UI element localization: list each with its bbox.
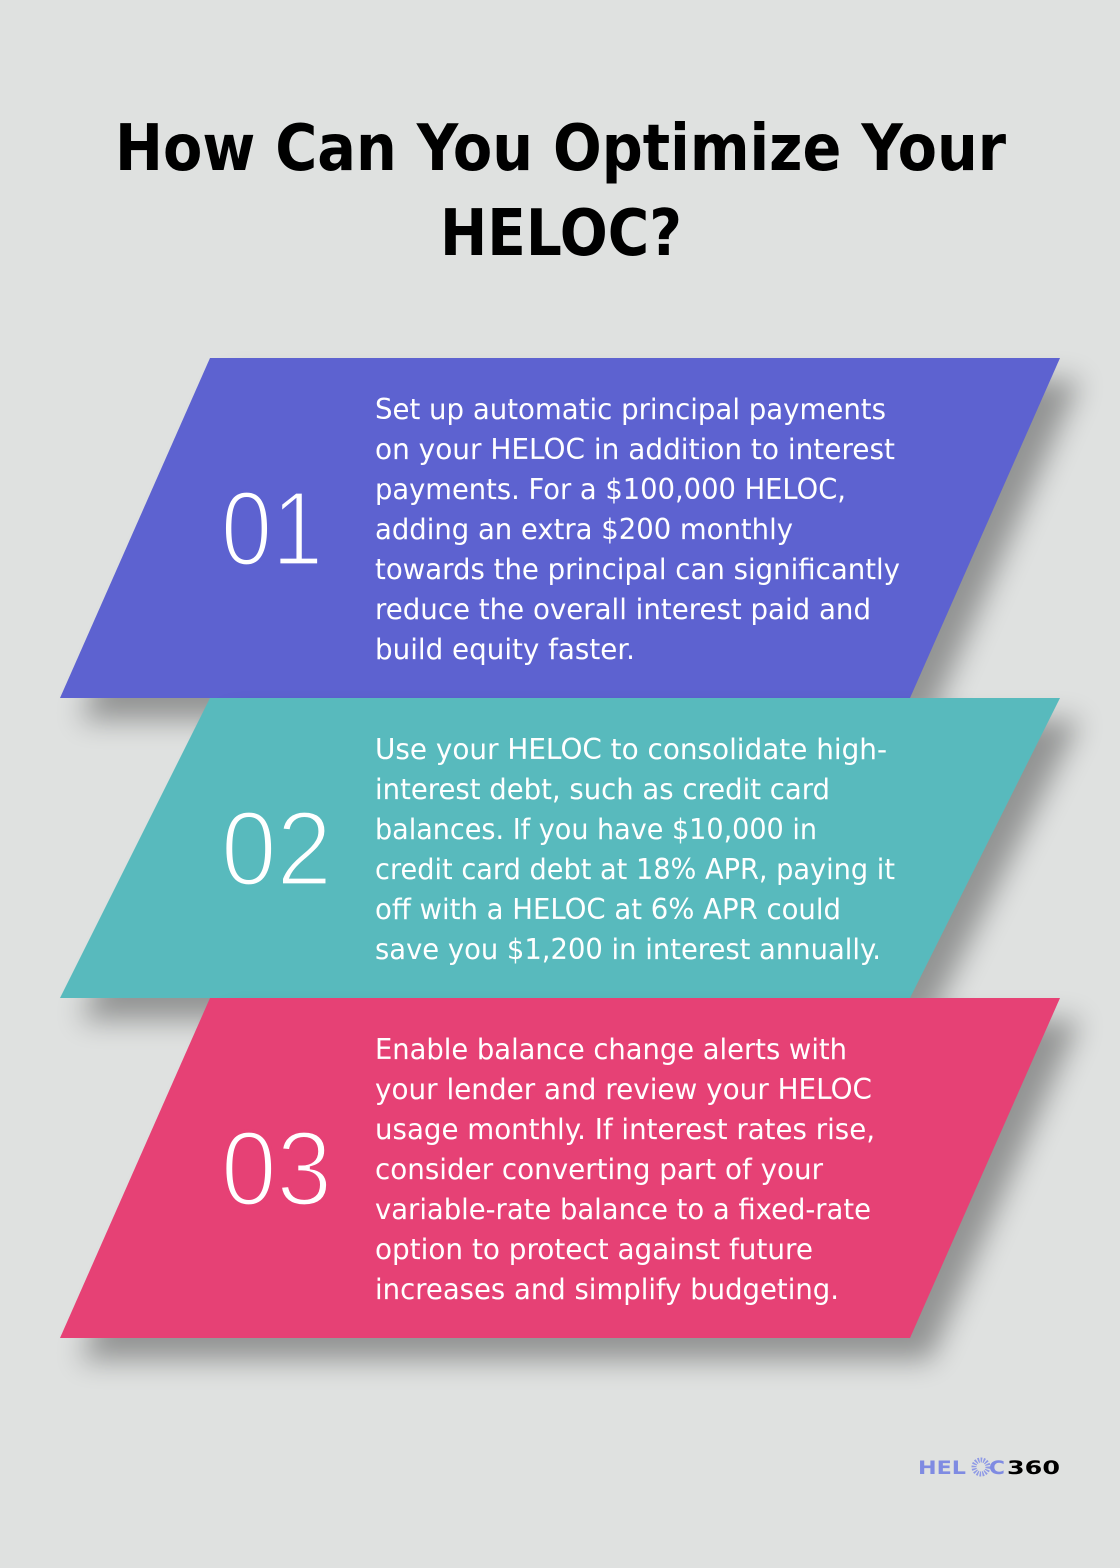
text: step 03 body: increases and simplify budgeting. (375, 1273, 839, 1306)
title (115, 112, 1006, 271)
panel: step 02 (60, 698, 1080, 1020)
text: step 02 body: save you $1,200 in interest annually. (375, 933, 881, 966)
text: step 03 body (375, 1033, 875, 1306)
text: step 03 body: variable-rate balance to a fixed-rate (375, 1193, 871, 1226)
number 02: 02 (221, 790, 332, 908)
title: HELOC? (440, 197, 682, 271)
text: step 01 body: towards the principal can significantly (375, 553, 900, 586)
logo: HELOC360: C (989, 1457, 1005, 1479)
panel: step 01 (60, 358, 1080, 720)
title: How Can You Optimize Your (115, 112, 1006, 186)
text: step 02 body: off with a HELOC at 6% APR could (375, 893, 841, 926)
text: step 02 body: interest debt, such as credit card (375, 773, 830, 806)
text: step 01 body: payments. For a $100,000 HELOC, (375, 473, 846, 506)
number 03: 03 (221, 1110, 332, 1228)
text: step 01 body (375, 393, 900, 666)
text: step 01 body: build equity faster. (375, 633, 635, 666)
panel: step 03 (60, 998, 1080, 1360)
text: step 02 body (375, 733, 895, 966)
number 01: 01 (221, 470, 323, 588)
text: step 03 body: Enable balance change alerts with (375, 1033, 847, 1066)
text: step 01 body: reduce the overall interest paid and (375, 593, 871, 626)
text: step 03 body: your lender and review your HELOC (375, 1073, 872, 1106)
text: step 01 body: on your HELOC in addition to interest (375, 433, 895, 466)
logo: HELOC360: HEL (918, 1457, 966, 1479)
logo: HELOC360: 360 (1007, 1457, 1060, 1479)
text: step 03 body: usage monthly. If interest rates rise, (375, 1113, 875, 1146)
text: step 03 body: consider converting part of your (375, 1153, 823, 1186)
text: step 02 body: Use your HELOC to consolidate high- (375, 733, 887, 766)
text: step 02 body: credit card debt at 18% APR, paying it (375, 853, 895, 886)
icon: logo swirl (974, 1460, 988, 1474)
logo: HELOC360 (918, 1457, 1060, 1479)
text: step 01 body: Set up automatic principal payments (375, 393, 886, 426)
text: step 02 body: balances. If you have $10,000 in (375, 813, 817, 846)
text: step 01 body: adding an extra $200 monthly (375, 513, 793, 546)
text: step 03 body: option to protect against future (375, 1233, 813, 1266)
